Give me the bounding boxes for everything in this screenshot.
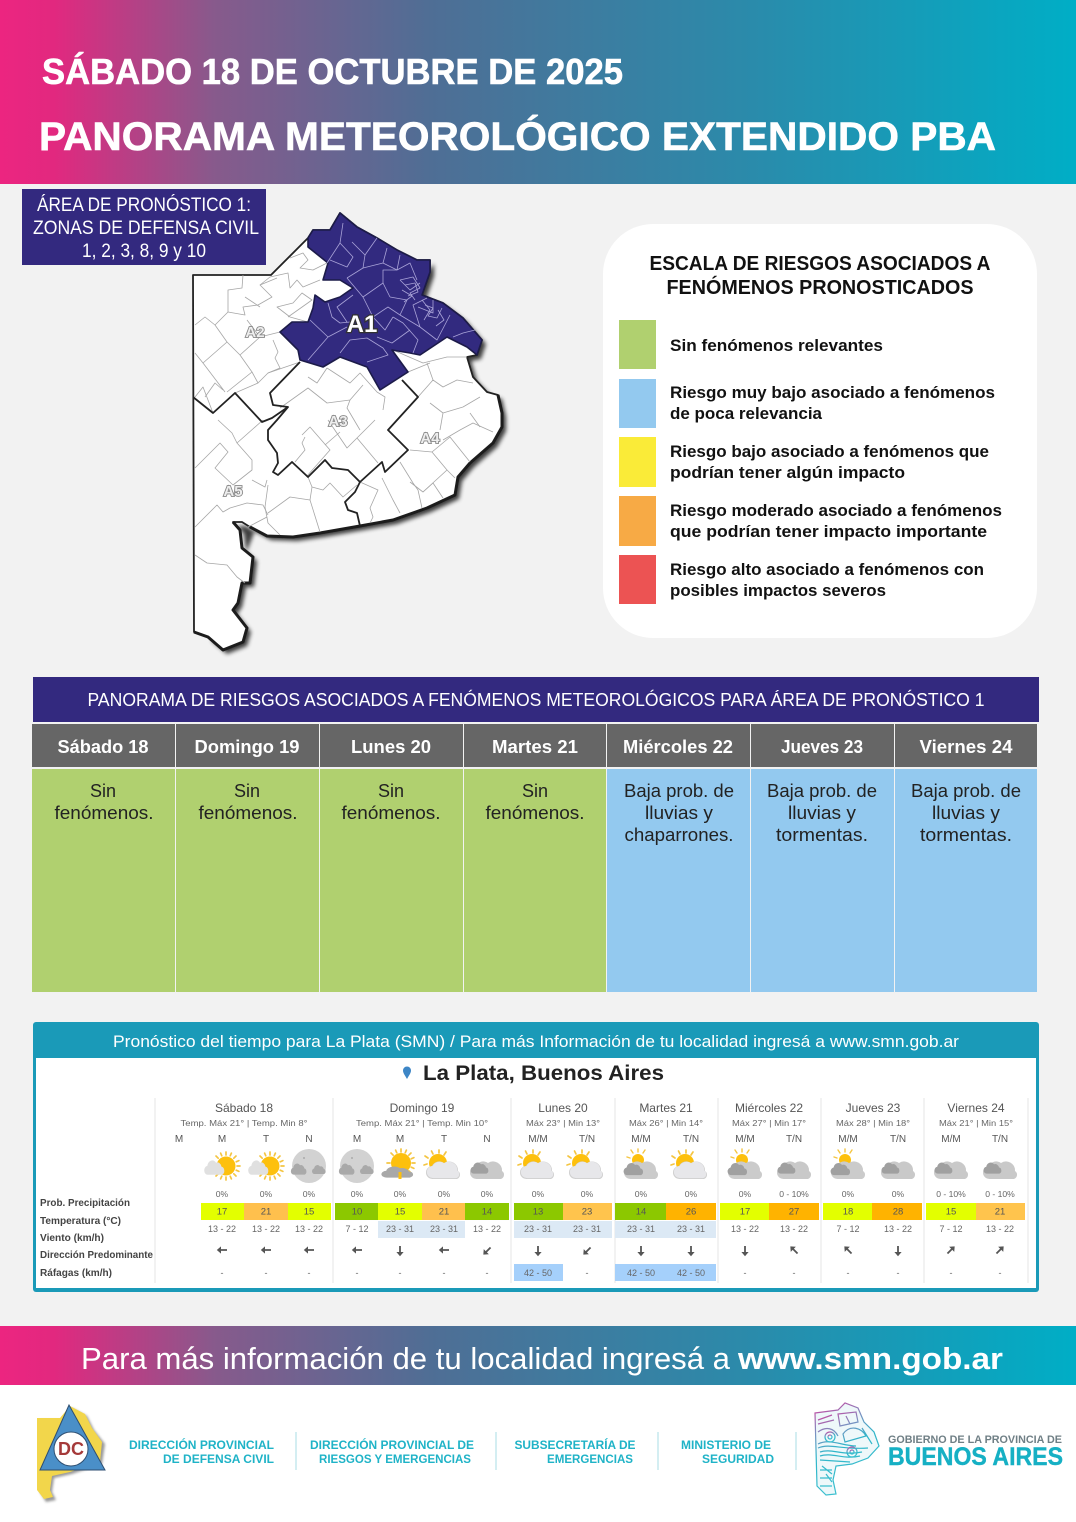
organisation names: SUBSECRETARÍA DE xyxy=(514,1437,636,1452)
wind gusts row: 42 - 50 xyxy=(677,1268,705,1278)
wind gusts row: - xyxy=(308,1268,310,1278)
day columns header: Jueves 23 xyxy=(781,737,863,757)
table title xyxy=(33,677,1039,722)
province outline xyxy=(193,213,502,650)
precipitation probability row xyxy=(216,1189,1015,1199)
temperature row xyxy=(201,1203,1025,1220)
column: Monday xyxy=(320,769,463,992)
label A2: A2 xyxy=(245,324,265,341)
precipitation probability row: 0% xyxy=(216,1189,229,1199)
day columns header: Lunes 20 xyxy=(351,737,431,757)
row labels: Viento (km/h) xyxy=(40,1233,104,1244)
labels A3 A4 A5 xyxy=(223,413,440,500)
row labels: Dirección Predominante xyxy=(40,1250,154,1261)
column: Saturday xyxy=(32,769,175,992)
wind speed row: 13 - 22 xyxy=(884,1224,912,1234)
legend item: none: Sin fenómenos relevantes xyxy=(670,337,883,355)
time of day labels: M/M xyxy=(838,1134,858,1145)
time of day labels: T/N xyxy=(992,1134,1008,1145)
legend item: high: posibles impactos severos xyxy=(670,582,886,600)
wind gusts row: - xyxy=(744,1268,746,1278)
precipitation probability row: 0% xyxy=(351,1189,364,1199)
weather icons xyxy=(204,1149,1017,1183)
time of day labels: M/M xyxy=(941,1134,961,1145)
daily max and min temperatures: Temp. Máx 21° | Temp. Min 8° xyxy=(180,1118,308,1128)
footer information band xyxy=(0,1326,1076,1385)
wind speed row: 23 - 31 xyxy=(627,1224,655,1234)
time of day labels: M/M xyxy=(528,1134,548,1145)
time of day labels: T/N xyxy=(890,1134,906,1145)
time of day labels: M xyxy=(175,1134,183,1145)
time of day labels: M xyxy=(218,1134,226,1145)
wind speed row: 13 - 22 xyxy=(731,1224,759,1234)
logo: Buenos Aires province emblem xyxy=(815,1403,879,1495)
row labels: Ráfagas (km/h) xyxy=(40,1268,112,1279)
column: Friday: Baja prob. de xyxy=(911,781,1021,801)
risk panorama table xyxy=(32,677,1039,992)
organisation names: DE DEFENSA CIVIL xyxy=(163,1452,274,1466)
temperature row: 26 xyxy=(686,1206,696,1218)
labels A3 A4 A5: A4 xyxy=(420,430,440,447)
day columns header: Sábado 18 xyxy=(58,737,148,757)
legend item: low xyxy=(619,437,989,487)
A1 highlighted area xyxy=(280,213,482,390)
temperature row: 17 xyxy=(740,1206,750,1218)
municipal boundaries xyxy=(195,253,493,583)
footer information band: www.smn.gob.ar xyxy=(737,1341,1003,1376)
map shadow xyxy=(212,264,506,654)
wind speed row: 13 - 22 xyxy=(252,1224,280,1234)
wind gusts row: 42 - 50 xyxy=(627,1268,655,1278)
logo: Defensa Civil xyxy=(37,1405,105,1502)
legend item: very low xyxy=(619,379,995,428)
wind speed row xyxy=(208,1221,1014,1238)
time of day labels: N xyxy=(305,1134,313,1145)
wind speed row: 13 - 22 xyxy=(780,1224,808,1234)
daily max and min temperatures: Máx 27° | Min 17° xyxy=(732,1118,806,1128)
column: Tuesday: fenómenos. xyxy=(486,803,584,823)
legend item: moderate: Riesgo moderado asociado a fenómenos xyxy=(670,502,1002,520)
wind gusts row: - xyxy=(442,1268,446,1278)
Buenos Aires government wordmark: BUENOS AIRES xyxy=(888,1443,1063,1471)
temperature row: 21 xyxy=(261,1206,271,1218)
column: Tuesday xyxy=(464,769,606,992)
time of day labels: M/M xyxy=(735,1134,755,1145)
column: Wednesday: lluvias y xyxy=(645,803,713,823)
column: Saturday: fenómenos. xyxy=(54,803,154,823)
day names: Viernes 24 xyxy=(947,1101,1005,1115)
wind gusts row: 42 - 50 xyxy=(524,1268,552,1278)
labels A3 A4 A5: A3 xyxy=(328,413,348,430)
organisation names: DIRECCIÓN PROVINCIAL xyxy=(129,1437,274,1452)
day columns header: Domingo 19 xyxy=(194,737,300,757)
precipitation probability row: 0% xyxy=(394,1189,407,1199)
wind gusts row: - xyxy=(950,1268,952,1278)
daily max and min temperatures: Máx 26° | Min 14° xyxy=(629,1118,703,1128)
logo: Defensa Civil: DC xyxy=(58,1439,84,1459)
precipitation probability row: 0% xyxy=(739,1189,752,1199)
labels A3 A4 A5: A5 xyxy=(223,483,243,500)
day columns header: Martes 21 xyxy=(492,737,578,757)
daily max and min temperatures: Máx 23° | Min 13° xyxy=(526,1118,600,1128)
organisation names: MINISTERIO DE xyxy=(681,1438,771,1452)
weather forecast panel xyxy=(33,1022,1039,1292)
precipitation probability row: 0% xyxy=(842,1189,855,1199)
wind speed row: 7 - 12 xyxy=(836,1224,860,1234)
legend item: high: Riesgo alto asociado a fenómenos con xyxy=(670,561,984,579)
column: Saturday: Sin xyxy=(90,781,116,801)
precipitation probability row: 0 - 10% xyxy=(779,1189,809,1199)
column: Friday: tormentas. xyxy=(920,825,1012,845)
temperature row: 10 xyxy=(352,1206,362,1218)
forecast area box: ZONAS DE DEFENSA CIVIL xyxy=(33,218,259,239)
temperature row: 21 xyxy=(439,1206,449,1218)
daily max and min temperatures: Máx 28° | Min 18° xyxy=(836,1118,910,1128)
organisation names: SEGURIDAD xyxy=(702,1452,774,1466)
precipitation probability row: 0% xyxy=(581,1189,594,1199)
thick coastline xyxy=(194,395,502,650)
column: Wednesday xyxy=(607,769,750,992)
column: Sunday: fenómenos. xyxy=(198,803,298,823)
time of day labels xyxy=(175,1134,1008,1145)
label A1: A1 xyxy=(347,311,377,338)
column: Sunday: Sin xyxy=(234,781,260,801)
wind direction arrows xyxy=(217,1244,1006,1257)
day names xyxy=(215,1101,1005,1115)
column: Friday: lluvias y xyxy=(932,803,1000,823)
column: Sunday xyxy=(176,769,319,992)
day columns header: Miércoles 22 xyxy=(623,737,733,757)
legend item: none xyxy=(619,320,883,369)
legend title: FENÓMENOS PRONOSTICADOS xyxy=(666,275,974,299)
wind gusts row: - xyxy=(220,1268,224,1278)
organisation names xyxy=(129,1437,774,1466)
wind speed row: 13 - 22 xyxy=(473,1224,501,1234)
row labels: Prob. Precipitación xyxy=(40,1198,130,1209)
temperature row: 13 xyxy=(533,1206,543,1218)
time of day labels: M/M xyxy=(631,1134,651,1145)
logos strip xyxy=(0,1385,1076,1522)
temperature row: 21 xyxy=(995,1206,1005,1218)
header band xyxy=(0,0,1076,184)
precipitation probability row: 0% xyxy=(260,1189,273,1199)
column: Thursday xyxy=(751,769,894,992)
time of day labels: T/N xyxy=(683,1134,699,1145)
precipitation probability row: 0% xyxy=(303,1189,316,1199)
temperature row: 28 xyxy=(893,1206,903,1218)
precipitation probability row: 0 - 10% xyxy=(936,1189,966,1199)
Buenos Aires government wordmark: GOBIERNO DE LA PROVINCIA DE xyxy=(888,1434,1062,1446)
day columns header: Viernes 24 xyxy=(920,737,1012,757)
forecast area box: ÁREA DE PRONÓSTICO 1: xyxy=(37,194,251,216)
temperature row: 15 xyxy=(304,1206,314,1218)
row labels: Temperatura (°C) xyxy=(40,1216,121,1227)
map of Buenos Aires province xyxy=(193,213,506,654)
wind speed row: 23 - 31 xyxy=(677,1224,705,1234)
legend title xyxy=(650,253,990,299)
column: Friday xyxy=(895,769,1037,992)
column: Tuesday: Sin xyxy=(522,781,548,801)
legend item: very low: Riesgo muy bajo asociado a fenómenos xyxy=(670,384,995,402)
temperature row: 14 xyxy=(482,1206,492,1218)
wind gusts row: - xyxy=(264,1268,268,1278)
wind speed row: 23 - 31 xyxy=(430,1224,458,1234)
temperature row: 27 xyxy=(789,1206,799,1218)
label A1 xyxy=(245,311,377,341)
organisation names: EMERGENCIAS xyxy=(547,1452,633,1466)
day names: Jueves 23 xyxy=(846,1101,901,1115)
day columns header xyxy=(32,724,1037,767)
legend item: moderate: que podrían tener impacto importante xyxy=(670,523,987,541)
temperature row: 18 xyxy=(843,1206,853,1218)
precipitation probability row: 0% xyxy=(481,1189,494,1199)
wind gusts row: - xyxy=(998,1268,1002,1278)
wind gusts row: - xyxy=(356,1268,358,1278)
daily max and min temperatures xyxy=(180,1118,1013,1128)
zone boundaries xyxy=(193,362,418,526)
precipitation probability row: 0% xyxy=(635,1189,648,1199)
daily max and min temperatures: Temp. Máx 21° | Temp. Min 10° xyxy=(356,1118,488,1128)
footer information band: Para más información de tu localidad ingresá a xyxy=(81,1341,731,1376)
day names: Sábado 18 xyxy=(215,1101,273,1115)
location pin icon xyxy=(403,1066,411,1079)
wind speed row: 23 - 31 xyxy=(573,1224,601,1234)
precipitation probability row: 0% xyxy=(532,1189,545,1199)
organisation names: DIRECCIÓN PROVINCIAL DE xyxy=(310,1437,474,1452)
column: Wednesday: chaparrones. xyxy=(624,825,734,845)
wind speed row: 13 - 22 xyxy=(295,1224,323,1234)
wind speed row: 7 - 12 xyxy=(345,1224,369,1234)
wind speed row: 13 - 22 xyxy=(986,1224,1014,1234)
organisation names: RIESGOS Y EMERGENCIAS xyxy=(319,1452,471,1466)
precipitation probability row: 0 - 10% xyxy=(985,1189,1015,1199)
day names: Martes 21 xyxy=(639,1101,693,1115)
wind gusts row: - xyxy=(586,1268,588,1278)
table title: PANORAMA DE RIESGOS ASOCIADOS A FENÓMENOS METEOROLÓGICOS PARA ÁREA DE PRONÓSTICO 1 xyxy=(88,689,984,710)
column: Monday: fenómenos. xyxy=(342,803,440,823)
wind gusts row: - xyxy=(792,1268,796,1278)
column: Monday: Sin xyxy=(378,781,404,801)
wind gusts row: - xyxy=(398,1268,402,1278)
row labels xyxy=(40,1198,154,1279)
precipitation probability row: 0% xyxy=(685,1189,698,1199)
legend item: low: podrían tener algún impacto xyxy=(670,464,905,482)
main title: PANORAMA METEOROLÓGICO EXTENDIDO PBA xyxy=(39,113,996,159)
temperature row: 17 xyxy=(217,1206,227,1218)
temperature row: 15 xyxy=(946,1206,956,1218)
time of day labels: T xyxy=(263,1134,269,1145)
wind gusts row: - xyxy=(896,1268,900,1278)
day dividers xyxy=(155,1098,1028,1283)
temperature row: 23 xyxy=(582,1206,592,1218)
time of day labels: N xyxy=(483,1134,491,1145)
forecast area box xyxy=(22,189,266,265)
wind gusts row xyxy=(220,1264,1002,1281)
wind speed row: 13 - 22 xyxy=(208,1224,236,1234)
daily max and min temperatures: Máx 21° | Min 15° xyxy=(939,1118,1013,1128)
legend item: moderate xyxy=(619,496,1002,546)
wind speed row: 7 - 12 xyxy=(939,1224,963,1234)
day names: Miércoles 22 xyxy=(735,1101,803,1115)
day names: Domingo 19 xyxy=(390,1101,455,1115)
time of day labels: T/N xyxy=(786,1134,802,1145)
vertical separators xyxy=(296,1432,796,1470)
wind speed row: 23 - 31 xyxy=(524,1224,552,1234)
date heading: SÁBADO 18 DE OCTUBRE DE 2025 xyxy=(42,51,623,92)
legend item: low: Riesgo bajo asociado a fenómenos que xyxy=(670,443,989,461)
wind speed row: 23 - 31 xyxy=(386,1224,414,1234)
time of day labels: M xyxy=(396,1134,404,1145)
column: Thursday: tormentas. xyxy=(776,825,868,845)
legend title: ESCALA DE RIESGOS ASOCIADOS A xyxy=(650,253,990,275)
column: Wednesday: Baja prob. de xyxy=(624,781,734,801)
panel heading: Pronóstico del tiempo para La Plata (SMN) / Para más Información de tu localidad ingresá a www.smn.gob.ar xyxy=(113,1033,960,1051)
column: Thursday: lluvias y xyxy=(788,803,856,823)
forecast area box: 1, 2, 3, 8, 9 y 10 xyxy=(82,241,206,262)
time of day labels: M xyxy=(353,1134,361,1145)
time of day labels: T xyxy=(441,1134,447,1145)
temperature row: 15 xyxy=(395,1206,405,1218)
wind gusts row: - xyxy=(846,1268,850,1278)
risk scale legend panel xyxy=(603,224,1037,638)
time of day labels: T/N xyxy=(579,1134,595,1145)
precipitation probability row: 0% xyxy=(438,1189,451,1199)
wind gusts row: - xyxy=(486,1268,488,1278)
temperature row: 14 xyxy=(636,1206,646,1218)
column: Thursday: Baja prob. de xyxy=(767,781,877,801)
location title: La Plata, Buenos Aires xyxy=(423,1062,664,1085)
legend item: high xyxy=(619,555,984,604)
legend item: very low: de poca relevancia xyxy=(670,405,823,423)
day names: Lunes 20 xyxy=(538,1101,588,1115)
precipitation probability row: 0% xyxy=(892,1189,905,1199)
